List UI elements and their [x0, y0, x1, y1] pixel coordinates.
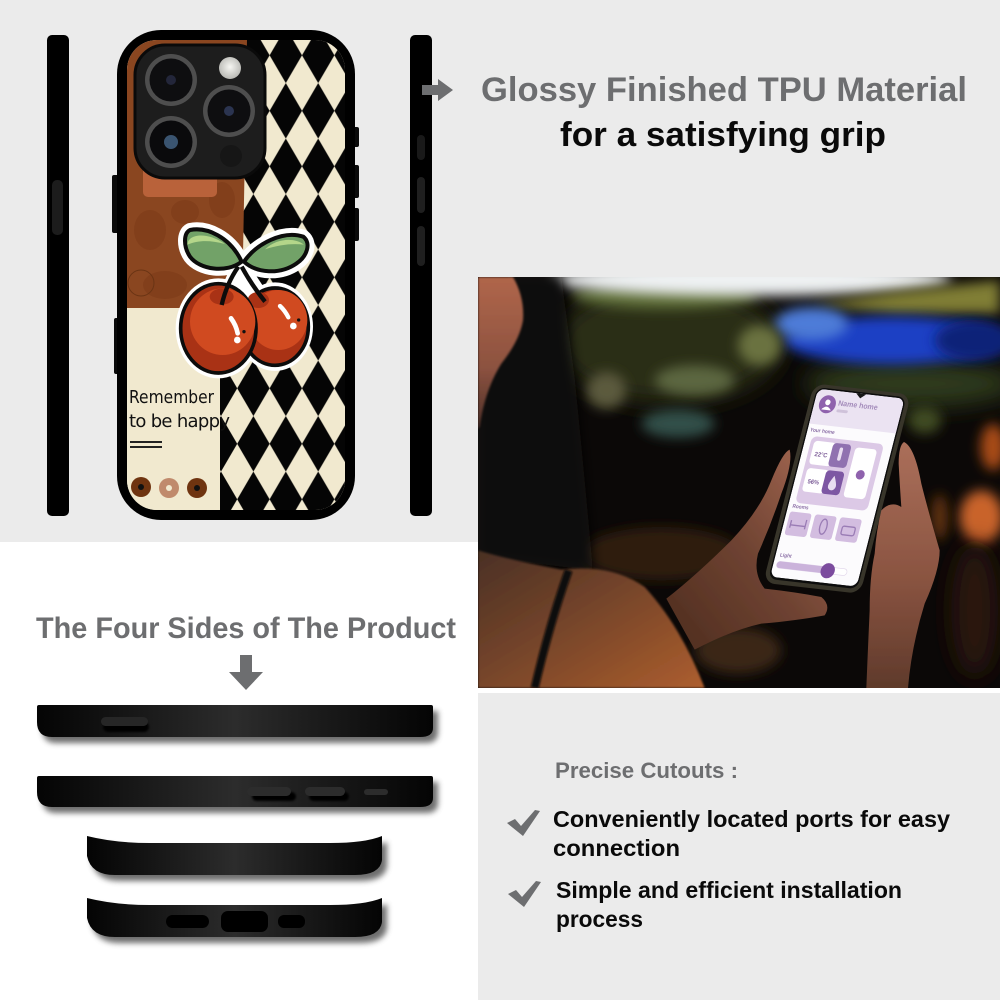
- leaves: [185, 229, 308, 271]
- flash: [219, 57, 241, 79]
- lens right: [203, 85, 255, 137]
- cherry sticker: [176, 229, 313, 378]
- lens top left: [145, 54, 197, 106]
- heading: glossy material: for a satisfying grip: [560, 116, 886, 154]
- heading: four sides: The Four Sides of The Product: [36, 612, 456, 645]
- woman's cheek: [478, 277, 523, 429]
- case side buttons: [112, 127, 359, 374]
- lens bottom left: [145, 116, 197, 168]
- woman's hair: [546, 277, 597, 568]
- printed artwork: [127, 40, 345, 510]
- camera module: [135, 45, 265, 178]
- app screen: Light: [779, 552, 793, 560]
- app header: [809, 389, 905, 433]
- icon: check mark 1: [507, 810, 540, 836]
- slogan text: [129, 387, 230, 448]
- climate panel: [795, 436, 884, 511]
- woman's shoulder: [478, 550, 705, 688]
- side strip 4: [87, 898, 387, 943]
- left cherry: [181, 284, 256, 373]
- phone body: [763, 383, 911, 594]
- heading: glossy material: Glossy Finished TPU Material: [481, 71, 967, 109]
- icon: check mark 2: [508, 881, 541, 907]
- app screen: Rooms: [792, 504, 809, 512]
- heading: glossy material: [481, 71, 967, 154]
- right side view of case: [410, 35, 432, 516]
- side strip 1: [37, 705, 438, 743]
- stems: [222, 267, 265, 305]
- left side view of case: [47, 35, 69, 516]
- arrow pointing down: [229, 655, 263, 690]
- sensor: [220, 145, 242, 167]
- case black frame: [117, 30, 355, 520]
- text: ports: connection: [553, 835, 680, 861]
- room icons: [789, 518, 856, 536]
- slogan text: Remember: [129, 387, 215, 408]
- text: ports: Conveniently located ports for easy: [553, 806, 950, 832]
- dress strap: [535, 570, 569, 688]
- left hand and arm: [666, 450, 827, 650]
- text: installation: Simple and efficient installation: [556, 877, 902, 903]
- app screen: Your home: [809, 427, 835, 436]
- text: installation: process: [556, 906, 643, 932]
- right cherry: [242, 288, 308, 365]
- blurred background scenery: [551, 264, 1000, 677]
- side strip 3: [87, 836, 387, 881]
- app screen: 22°C: [814, 452, 828, 460]
- arrow pointing right: [422, 79, 453, 101]
- smartphone: [763, 383, 911, 594]
- phone case back: [112, 30, 359, 520]
- app screen: Name home: [837, 398, 879, 412]
- sticker white outline: [185, 229, 308, 305]
- light slider: [776, 561, 848, 576]
- water drop icon: [828, 476, 836, 490]
- small flowers: [131, 477, 207, 498]
- slogan text: to be happy: [129, 411, 230, 432]
- room tiles: [784, 511, 812, 537]
- right hand: [866, 442, 940, 688]
- lifestyle photo: [478, 264, 1000, 688]
- text: installation: [556, 877, 902, 932]
- thermometer icon: [837, 447, 844, 461]
- text: ports: [553, 806, 950, 861]
- side strip 2: [37, 776, 438, 813]
- app screen: 56%: [807, 479, 820, 487]
- text: precise cutouts heading: Precise Cutouts :: [555, 758, 738, 783]
- app screen: [770, 389, 905, 587]
